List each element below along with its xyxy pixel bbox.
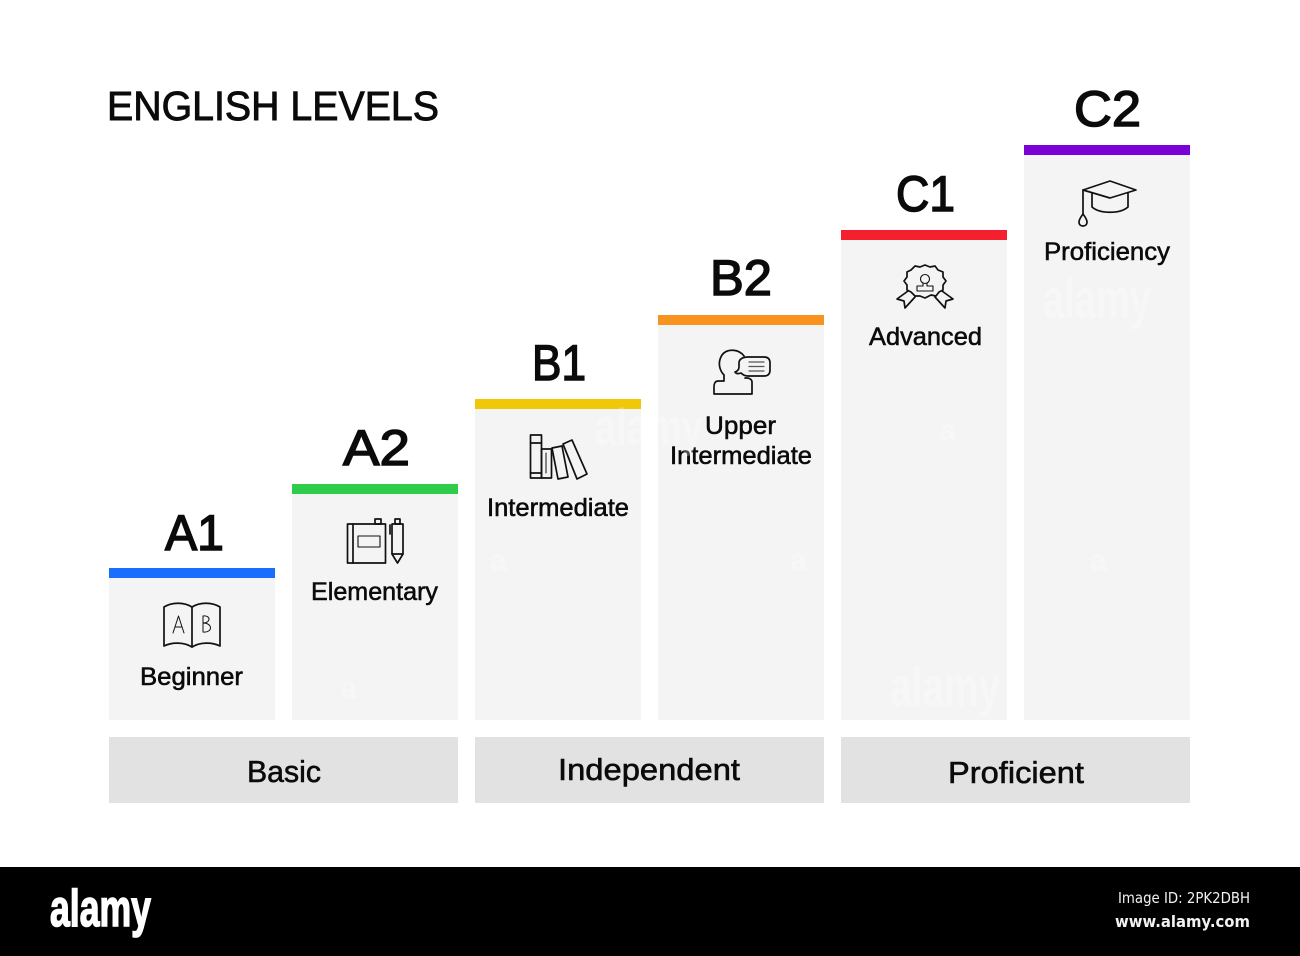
watermarks: a — [939, 414, 956, 447]
column: A2 Elementary: Elementary — [311, 578, 438, 606]
watermarks: a — [340, 672, 357, 705]
column: B2 Upper Intermediate: Intermediate — [670, 442, 812, 470]
title: ENGLISH LEVELS — [107, 83, 439, 129]
column: C1 Advanced: Advanced — [869, 323, 982, 351]
icon: leaning books — [530, 435, 587, 479]
band: Independent: Independent — [558, 752, 740, 787]
band: Proficient: Proficient — [948, 755, 1084, 790]
band: Basic — [109, 737, 458, 803]
column: C2 Proficiency — [1024, 81, 1190, 720]
column: B1 Intermediate: B1 — [532, 335, 586, 391]
watermarks: alamy — [890, 655, 1000, 718]
icon: person speaking — [714, 350, 770, 394]
column: B1 Intermediate — [475, 335, 641, 720]
column: C2 Proficiency: C2 — [1074, 81, 1141, 137]
footer image id: Image ID: 2PK2DBH — [1118, 889, 1250, 907]
column: A2 Elementary — [292, 420, 458, 720]
band: Proficient — [841, 737, 1190, 803]
column: B2 Upper Intermediate: Upper — [705, 412, 776, 440]
column: B1 Intermediate: Intermediate — [487, 494, 629, 522]
footer logo: alamy — [50, 880, 151, 938]
footer url: www.alamy.com — [1115, 912, 1250, 931]
footer bar — [0, 867, 1300, 956]
watermarks: a — [1090, 544, 1107, 577]
column: B2 Upper Intermediate: B2 — [710, 250, 772, 306]
watermarks: a — [490, 544, 507, 577]
watermarks — [340, 267, 1151, 718]
column: A1 Beginner: Beginner — [140, 663, 243, 691]
watermarks: a — [790, 544, 807, 577]
watermarks: alamy — [595, 399, 703, 457]
watermarks: alamy — [1043, 267, 1151, 330]
column: A1 Beginner — [109, 505, 275, 720]
icon: award rosette — [897, 265, 953, 308]
column: C2 Proficiency: Proficiency — [1044, 238, 1171, 266]
column: B2 Upper Intermediate — [658, 250, 824, 720]
band: Independent — [475, 737, 824, 803]
band: Basic: Basic — [247, 754, 321, 789]
icon: graduation cap — [1079, 181, 1136, 226]
column: A2 Elementary: A2 — [343, 420, 410, 476]
column: C1 Advanced — [841, 166, 1007, 720]
icon: open book A B — [164, 603, 220, 647]
icon: notebook and pen — [348, 519, 403, 563]
column: C1 Advanced: C1 — [896, 166, 955, 222]
column: A1 Beginner: A1 — [165, 505, 224, 561]
